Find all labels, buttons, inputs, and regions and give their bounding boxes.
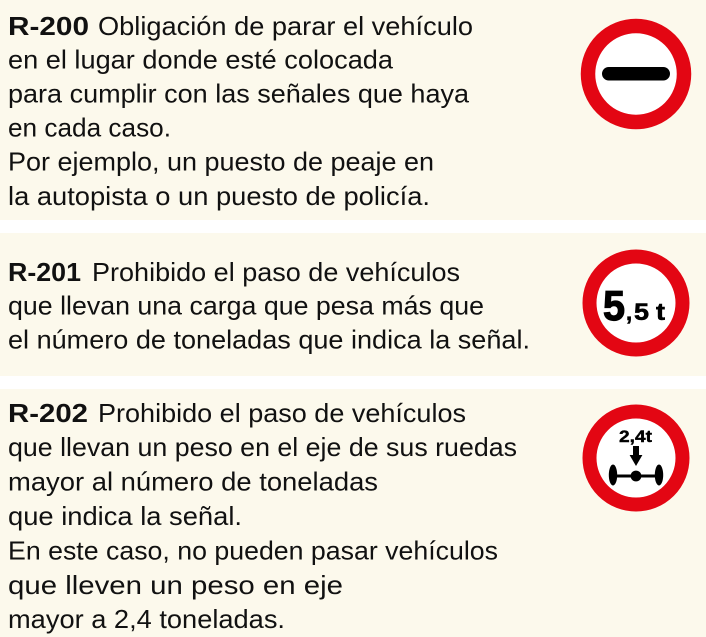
text: R-201 description: que llevan una carga que pesa más que	[8, 290, 484, 320]
icon: 5,5 t weight limit sign	[590, 256, 682, 350]
text: R-200 description: en cada caso.	[8, 112, 171, 142]
icon: stop sign with horizontal bar	[588, 26, 684, 122]
icon: 5,5 t weight limit sign: t	[656, 299, 665, 326]
text: R-201 description: Prohibido el paso de vehículos	[92, 257, 460, 287]
text: R-201 description	[8, 257, 530, 354]
text: R-200 description: para cumplir con las señales que haya	[8, 78, 470, 108]
text: R-202 description: mayor al número de toneladas	[8, 466, 378, 496]
text: R-202 description: que llevan un peso en el eje de sus ruedas	[8, 432, 517, 462]
text: R-202 description: mayor a 2,4 toneladas.	[8, 604, 285, 634]
panel: R-201	[0, 233, 706, 376]
text: R-202 description: que lleven un peso en eje	[8, 570, 343, 600]
text: R-201 description: el número de toneladas que indica la señal.	[8, 324, 530, 354]
panel: R-200	[0, 0, 706, 220]
panel: R-202	[0, 389, 706, 637]
icon: 5,5 t weight limit sign: ,	[626, 300, 632, 325]
text: R-200 description: en el lugar donde esté colocada	[8, 44, 394, 74]
text: R-200 description: R-200	[8, 11, 89, 41]
icon: 5,5 t weight limit sign: 5	[634, 299, 649, 326]
icon: 5,5 t weight limit sign: 5	[603, 282, 625, 329]
text: R-202 description	[8, 398, 517, 634]
text: R-200 description: Por ejemplo, un puesto de peaje en	[8, 146, 434, 176]
text: R-200 description: Obligación de parar el vehículo	[98, 11, 473, 41]
icon: 2,4 t axle weight limit sign: 2,4t	[619, 427, 652, 446]
text: R-202 description: En este caso, no pueden pasar vehículos	[8, 536, 498, 566]
text: R-200 description	[8, 11, 473, 211]
text: R-200 description: la autopista o un puesto de policía.	[8, 181, 430, 211]
icon: 2,4 t axle weight limit sign	[590, 412, 682, 504]
text: R-201 description: R-201	[8, 257, 81, 287]
text: R-202 description: R-202	[8, 398, 88, 428]
text: R-202 description: Prohibido el paso de vehículos	[98, 398, 466, 428]
text: R-202 description: que indica la señal.	[8, 501, 242, 531]
